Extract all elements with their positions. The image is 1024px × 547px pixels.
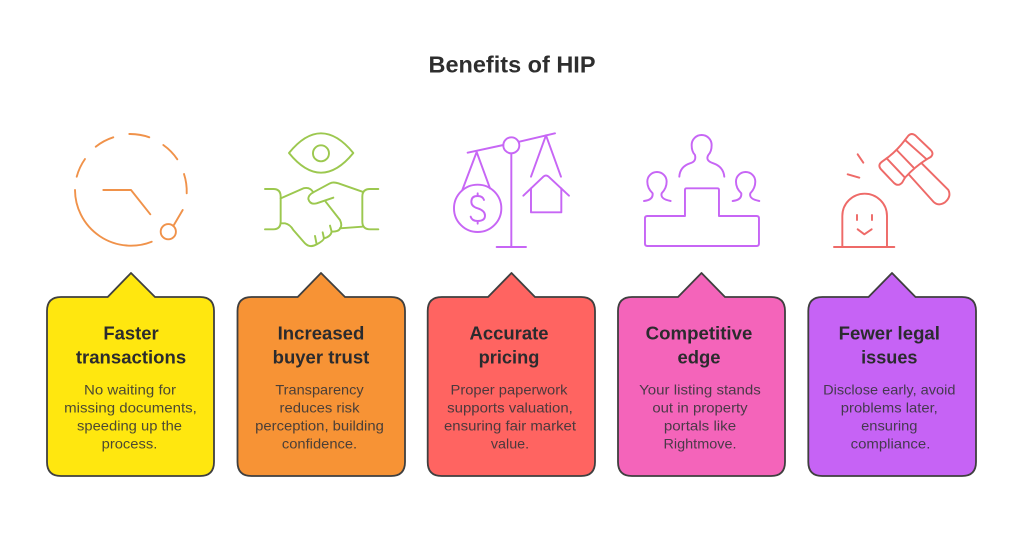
card shape: [618, 273, 785, 476]
description: speeding up the: [77, 417, 182, 433]
heading: Competitive: [646, 322, 752, 343]
person and impact ticks: [834, 154, 894, 247]
panel: increased buyer trust: [238, 273, 405, 476]
heading: Increased: [278, 322, 364, 343]
icon: eye over handshake: [265, 133, 378, 246]
description: missing documents,: [64, 399, 197, 415]
description: [444, 381, 576, 451]
description: confidence.: [282, 435, 357, 451]
heading: [470, 322, 548, 367]
description: ensuring fair market: [444, 417, 576, 433]
heading: Fewer legal: [839, 322, 940, 343]
description: Disclose early, avoid: [823, 381, 955, 397]
heading: [273, 322, 369, 367]
panel: accurate pricing: [428, 273, 595, 476]
icon: gavel and smiling person: [834, 134, 949, 247]
heading: Faster: [103, 322, 159, 343]
description: value.: [491, 435, 529, 451]
gavel: [879, 134, 949, 204]
description: Your listing stands: [639, 381, 761, 397]
card shape: [428, 273, 595, 476]
eye: [289, 133, 353, 173]
heading: buyer trust: [273, 346, 369, 367]
card shape: [808, 273, 976, 476]
description: compliance.: [851, 435, 930, 451]
description: problems later,: [841, 399, 938, 415]
description: ensuring: [861, 417, 917, 433]
handshake: [265, 182, 378, 246]
icon: people around podium: [644, 135, 759, 246]
icon: balance scale with dollar and house: [454, 133, 569, 247]
description: process.: [102, 435, 157, 451]
heading: Accurate: [470, 322, 548, 343]
description: No waiting for: [84, 381, 176, 397]
description: [255, 381, 384, 451]
description: [823, 381, 955, 451]
heading: [839, 322, 940, 367]
card shape: [47, 273, 214, 476]
description: reduces risk: [280, 399, 361, 415]
description: Transparency: [275, 381, 364, 397]
description: Proper paperwork: [450, 381, 569, 397]
description: portals like: [664, 417, 736, 433]
icon: clock with dashed circle: [75, 134, 187, 246]
heading: pricing: [479, 346, 539, 367]
description: out in property: [652, 399, 748, 415]
panel: faster transactions: [47, 273, 214, 476]
description: Rightmove.: [664, 435, 736, 451]
panel: fewer legal issues: [808, 273, 976, 476]
description: supports valuation,: [447, 399, 573, 415]
heading: issues: [861, 346, 917, 367]
title: Benefits of HIP: [428, 51, 596, 77]
description: [64, 381, 197, 451]
heading: edge: [678, 346, 720, 367]
heading: [76, 322, 186, 367]
heading: [646, 322, 752, 367]
description: [639, 381, 761, 451]
card shape: [238, 273, 405, 476]
panel: competitive edge: [618, 273, 785, 476]
description: perception, building: [255, 417, 384, 433]
heading: transactions: [76, 346, 186, 367]
